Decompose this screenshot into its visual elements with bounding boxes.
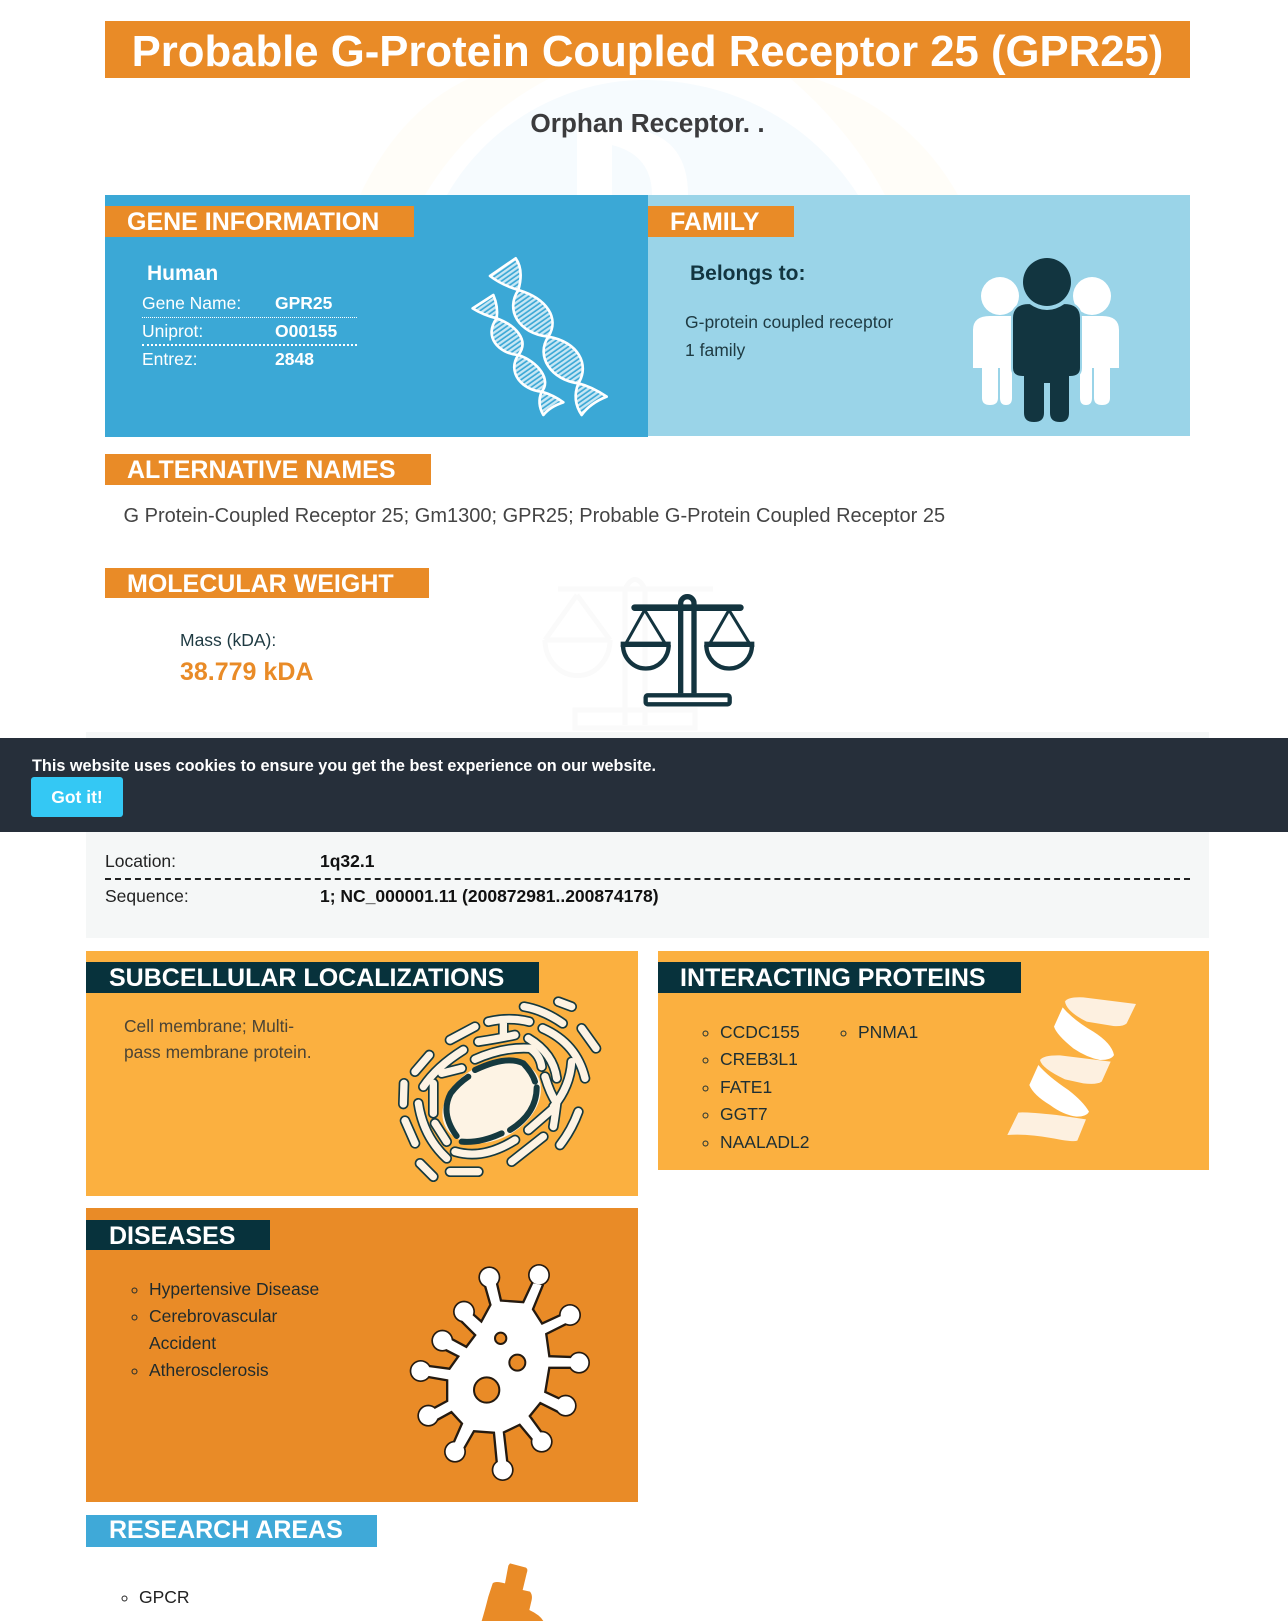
background watermark logo [448,80,858,195]
icon: cell [398,996,602,1182]
panel: genomic location [86,732,1209,938]
species label: Human [147,262,218,285]
protein list column 2: PNMA1 [858,1022,918,1042]
disease list: Atherosclerosis [149,1360,269,1380]
panel: interacting proteins [658,951,1209,1170]
subtitle: Orphan Receptor. . [530,108,765,138]
cookie message: This website uses cookies to ensure you get the best experience on our website. [32,757,656,775]
entrez row: 2848 [275,349,314,369]
heading: interacting proteins: INTERACTING PROTEINS [680,964,986,992]
uniprot row: Uniprot: [142,321,203,341]
icon: protein helix [1007,997,1136,1142]
heading: family: FAMILY [670,208,759,236]
panel: subcellular localizations [86,951,638,1196]
family description [685,312,893,360]
sequence value: 1; NC_000001.11 (200872981..200874178) [320,886,659,906]
panel: diseases [86,1208,638,1502]
family description: G-protein coupled receptor [685,312,893,332]
disease list [132,1279,319,1380]
icon: research [482,1563,544,1621]
localization text [124,1016,312,1062]
protein list column 1: CREB3L1 [720,1049,798,1069]
protein list column 1: GGT7 [720,1104,768,1124]
icon: virus [410,1264,590,1481]
research areas list: GPCR [139,1587,190,1607]
localization text: pass membrane protein. [124,1042,312,1062]
belongs to label: Belongs to: [690,262,806,285]
title banner: Probable G-Protein Coupled Receptor 25 (GPR25) [132,27,1163,76]
entrez row: Entrez: [142,349,197,369]
gene name row: Gene Name: [142,293,241,313]
entrez row [142,349,314,369]
uniprot row [142,321,337,341]
heading: alternative names: ALTERNATIVE NAMES [127,456,396,484]
protein list column 1: NAALADL2 [720,1132,810,1152]
gene name row: GPR25 [275,293,332,313]
protein list column 1: CCDC155 [720,1022,800,1042]
disease list: Hypertensive Disease [149,1279,319,1299]
protein list column 1 [702,1022,810,1152]
got it button: Got it! [51,787,103,807]
protein list column 1: FATE1 [720,1077,772,1097]
icon: dna [471,256,608,416]
icon: balance scale [620,594,754,706]
heading: family [648,206,794,237]
icon: watermark scale [540,570,740,735]
disease list: Cerebrovascular Accident [149,1306,277,1353]
sequence label: Sequence: [105,886,189,906]
heading: molecular weight: MOLECULAR WEIGHT [127,570,394,598]
heading: diseases: DISEASES [109,1222,235,1250]
heading: subcellular localizations: SUBCELLULAR LOCALIZATIONS [109,964,504,992]
heading: gene information: GENE INFORMATION [127,208,379,236]
panel: gene information [105,195,648,437]
heading: research areas: RESEARCH AREAS [109,1516,343,1544]
location value: 1q32.1 [320,851,374,871]
location label: Location: [105,851,176,871]
alternative names text: G Protein-Coupled Receptor 25; Gm1300; GPR25; Probable G-Protein Coupled Receptor 25 [124,505,945,527]
localization text: Cell membrane; Multi- [124,1016,294,1036]
uniprot row: O00155 [275,321,337,341]
cookie banner [0,738,1288,832]
panel: family [648,195,1190,436]
got it button [31,777,123,817]
gene name row [142,293,332,313]
heading: diseases [86,1220,270,1250]
mass label: Mass (kDA): [180,630,276,650]
mass value: 38.779 kDA [180,658,313,686]
icon: people [973,258,1119,422]
family description: 1 family [685,340,745,360]
